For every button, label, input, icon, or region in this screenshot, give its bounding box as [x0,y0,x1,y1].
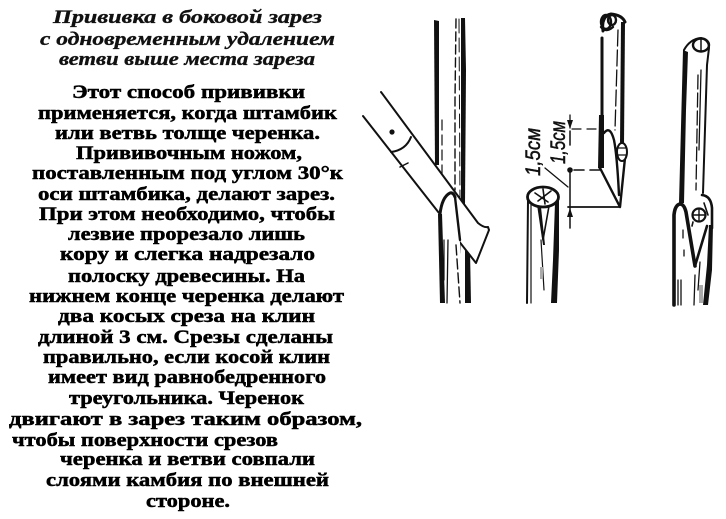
dimension labels: 1,5см [522,128,545,176]
text block: description: кору и слегка надрезало [60,244,315,265]
dimension labels: 1,5см [547,121,570,164]
text block: description: полоску древесины. На [68,266,306,287]
text block: description: чтобы поверхности срезов [12,430,278,451]
illustration: finished graft [674,38,713,305]
text block: description: двигают в зарез таким образом, [9,409,362,430]
bud [692,203,708,226]
scion in cut [679,38,709,203]
side bud [617,143,627,161]
title: ветви выше места зареза [59,49,316,70]
text block: description: Этот способ прививки [72,82,305,103]
scion top bud [601,14,625,31]
text block: description: применяется, когда штамбик [38,103,337,124]
text block: description: оси штамбика, делают зарез. [38,184,335,205]
text block: description: правильно, если косой клин [43,347,330,368]
text block: description: треугольника. Черенок [69,388,304,409]
title: Прививка в боковой зарез [52,7,323,28]
text block: description: длиной 3 см. Срезы сделаны [38,327,333,348]
text block: description: нижнем конце черенка делают [29,286,345,307]
text block: description: Прививочным ножом, [76,143,302,164]
illustration: prepared scion with dimensions [522,14,627,228]
text block: description: имеет вид равнобедренного [48,367,326,388]
text block: description: лезвие прорезало лишь [68,224,305,245]
bark flap [438,193,462,303]
illustration: rootstock with cut [527,187,559,303]
illustration: knife cutting the trunk [363,18,489,303]
text block: description: слоями камбия по внешней [46,470,329,491]
knife [363,92,489,263]
text block: description: два косых среза на клин [58,306,315,327]
text block: description: При этом необходимо, чтобы [39,204,335,225]
text block: description: или ветвь толще черенка. [55,123,320,144]
text block: description [9,82,362,512]
trunk [434,18,471,303]
dimension lines [545,115,620,228]
scion [598,22,625,207]
text block: description: черенка и ветви совпали [60,449,315,470]
dimension labels [522,121,570,176]
text block: description: стороне. [146,491,230,512]
title [40,7,335,70]
text block: description: поставленным под углом 30°к [32,163,343,184]
rootstock [674,195,713,305]
title: с одновременным удалением [40,29,335,50]
